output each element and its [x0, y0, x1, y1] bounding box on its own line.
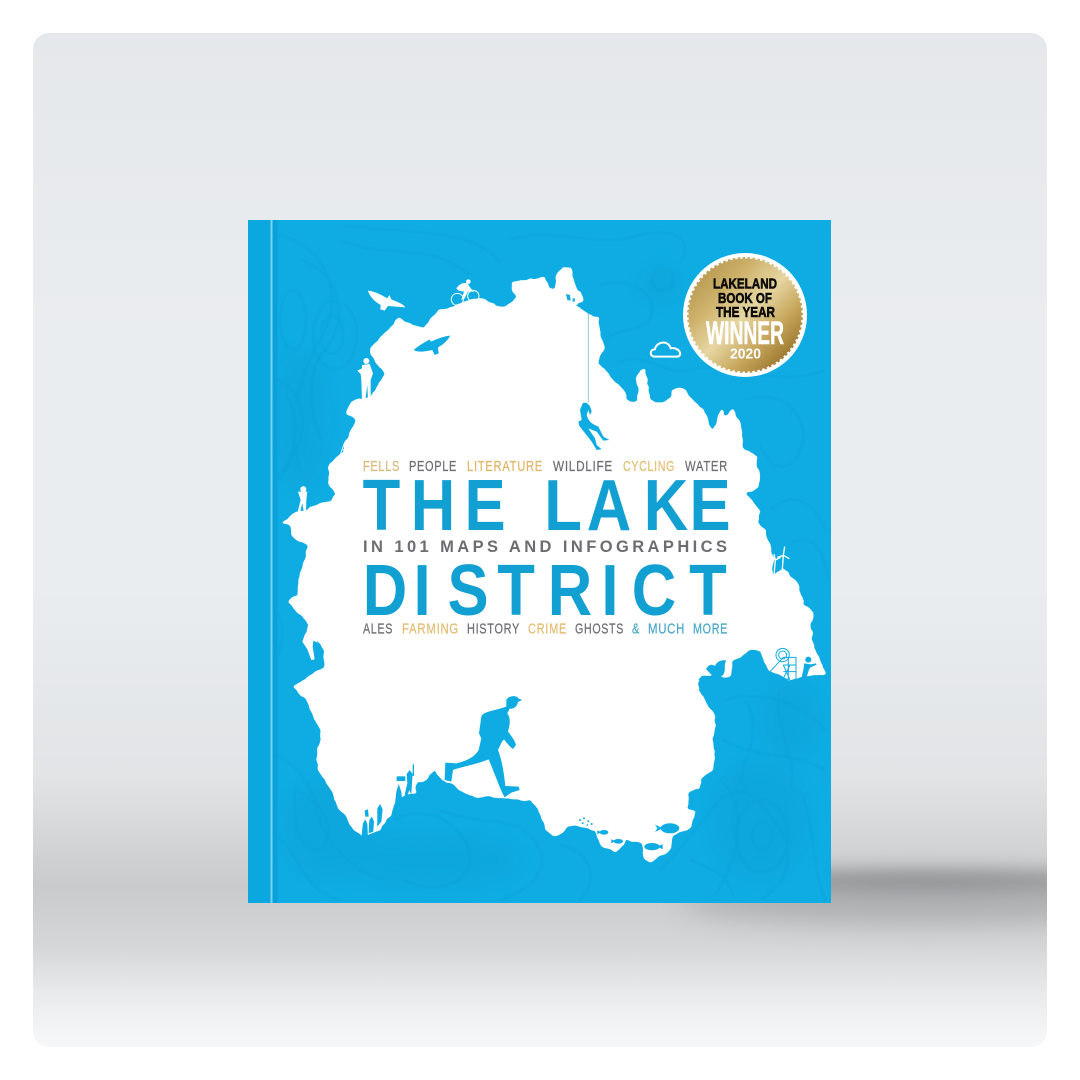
award badge — [683, 253, 807, 377]
icon: mine pithead — [770, 648, 796, 680]
icon: miner — [802, 657, 817, 677]
top keyword row: CYCLING — [623, 459, 675, 475]
map texture — [284, 280, 812, 878]
bottom keyword row: & — [632, 622, 640, 638]
badge text: 2020 — [730, 346, 761, 362]
bottom keyword row: HISTORY — [467, 622, 520, 638]
title: DISTRICT: DISTRICT — [363, 550, 727, 631]
badge text — [706, 276, 784, 362]
bottom keyword row: ALES — [363, 622, 393, 638]
title block — [363, 459, 731, 638]
bottom keyword row: MORE — [693, 622, 728, 638]
badge text: LAKELAND — [713, 276, 777, 292]
icon: wind turbines — [771, 547, 789, 576]
icon: white eagle — [368, 291, 405, 311]
icon: cyclist — [451, 279, 479, 305]
bottom keyword row: FARMING — [402, 622, 459, 638]
subtitle: IN 101 MAPS AND INFOGRAPHICS — [363, 538, 727, 556]
icon: fish — [579, 817, 679, 850]
badge text: BOOK OF — [718, 290, 772, 307]
icon: small walker — [297, 486, 307, 513]
icon: runner — [445, 696, 522, 797]
spine crease — [248, 220, 271, 903]
top keyword row: LITERATURE — [467, 459, 543, 475]
bottom keyword row: GHOSTS — [575, 622, 624, 638]
top keyword row — [363, 459, 728, 475]
cover base — [248, 220, 831, 903]
icon: hiker — [357, 358, 373, 400]
icon: cloud — [651, 343, 680, 357]
badge text: WINNER — [706, 315, 784, 351]
icon: white climber — [302, 625, 317, 660]
top keyword row: FELLS — [363, 459, 400, 475]
icon: foliage — [341, 443, 363, 454]
bottom keyword row — [363, 622, 728, 638]
title: THE LAKE: THE LAKE — [363, 465, 731, 546]
top keyword row: WILDLIFE — [553, 459, 613, 475]
book cover — [248, 220, 831, 903]
top keyword row: PEOPLE — [409, 459, 457, 475]
icon: blue eagle — [414, 336, 450, 355]
bottom keyword row: MUCH — [648, 622, 685, 638]
icon: squirrel — [698, 660, 727, 683]
badge text: THE YEAR — [716, 304, 775, 321]
icon: rock climber on rope — [566, 294, 609, 450]
bottom keyword row: CRIME — [528, 622, 567, 638]
top keyword row: WATER — [685, 459, 728, 475]
icon: walkers on the ridge — [361, 764, 414, 837]
white Lake District map shape — [282, 266, 825, 863]
